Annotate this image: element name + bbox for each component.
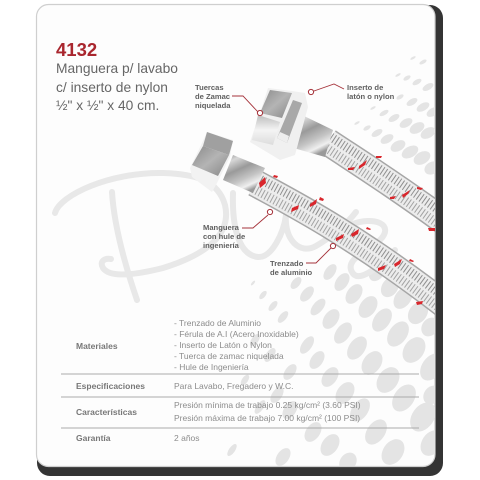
row: Características: Características [76,407,137,417]
row: Materiales: - Férula de A.I (Acero Inoxidable) [174,329,299,339]
row: Garantía: 2 años [174,433,200,443]
title: product code: 4132 [56,39,97,60]
callout: Manguera con hule de ingeniería: Manguera [203,223,240,232]
callout: Inserto de latón o nylon: latón o nylon [347,92,395,101]
row: Especificaciones [76,381,294,391]
callout: Trenzado de aluminio: de aluminio [270,268,313,277]
row: Materiales: - Tuerca de zamac niquelada [174,351,284,361]
callout: Tuercas de Zamac niquelada: de Zamac [195,92,230,101]
lower nut [190,132,233,192]
lower hose [252,178,448,310]
upper ferrule [296,116,333,157]
row: Materiales: - Inserto de Latón o Nylon [174,340,272,350]
row: Materiales: Materiales [76,341,118,351]
callout: Tuercas de Zamac niquelada: Tuercas [195,83,224,92]
background script logo [55,173,395,300]
card: white panel [36,4,435,466]
specification table [61,318,419,443]
red hose markings [259,156,435,305]
callout: Manguera con hule de ingeniería: con hule de [203,232,245,241]
subtitle: product description: c/ inserto de nylon [56,80,168,95]
callout: Manguera con hule de ingeniería: ingeniería [203,241,240,250]
row: Materiales: - Trenzado de Aluminio [174,318,261,328]
row: Especificaciones: Especificaciones [76,381,145,391]
row: Características [76,400,361,423]
hoses illustration [190,88,448,310]
row: Características: Presión mínima de trabajo 0.25 kg/cm² (3.60 PSI) [174,400,361,410]
callout: Tuercas de Zamac niquelada: niquelada [195,101,231,110]
row: Especificaciones: Para Lavabo, Fregadero y W.C. [174,381,294,391]
row: Características: Presión máxima de trabajo 7.00 kg/cm² (100 PSI) [174,413,360,423]
callout: Trenzado de aluminio [270,243,336,277]
row: Materiales: - Hule de Ingeniería [174,362,249,372]
upper hose [325,137,448,227]
row: Garantía [76,433,200,443]
callout: Trenzado de aluminio: Trenzado [270,259,304,268]
callout: Manguera con hule de ingeniería [203,209,273,250]
lower ferrule [223,155,265,193]
background dot pattern [226,55,449,475]
callout: Tuercas de Zamac niquelada [195,83,263,116]
subtitle: product description: Manguera p/ lavabo [56,61,178,76]
row: Garantía: Garantía [76,433,111,443]
callout: Inserto de latón o nylon [308,83,395,101]
subtitle: product description [56,61,178,113]
callout: Inserto de latón o nylon: Inserto de [347,83,383,92]
upper nut [250,88,308,160]
row: Materiales [76,318,299,372]
subtitle: product description: ½" x ½" x 40 cm. [56,98,159,113]
